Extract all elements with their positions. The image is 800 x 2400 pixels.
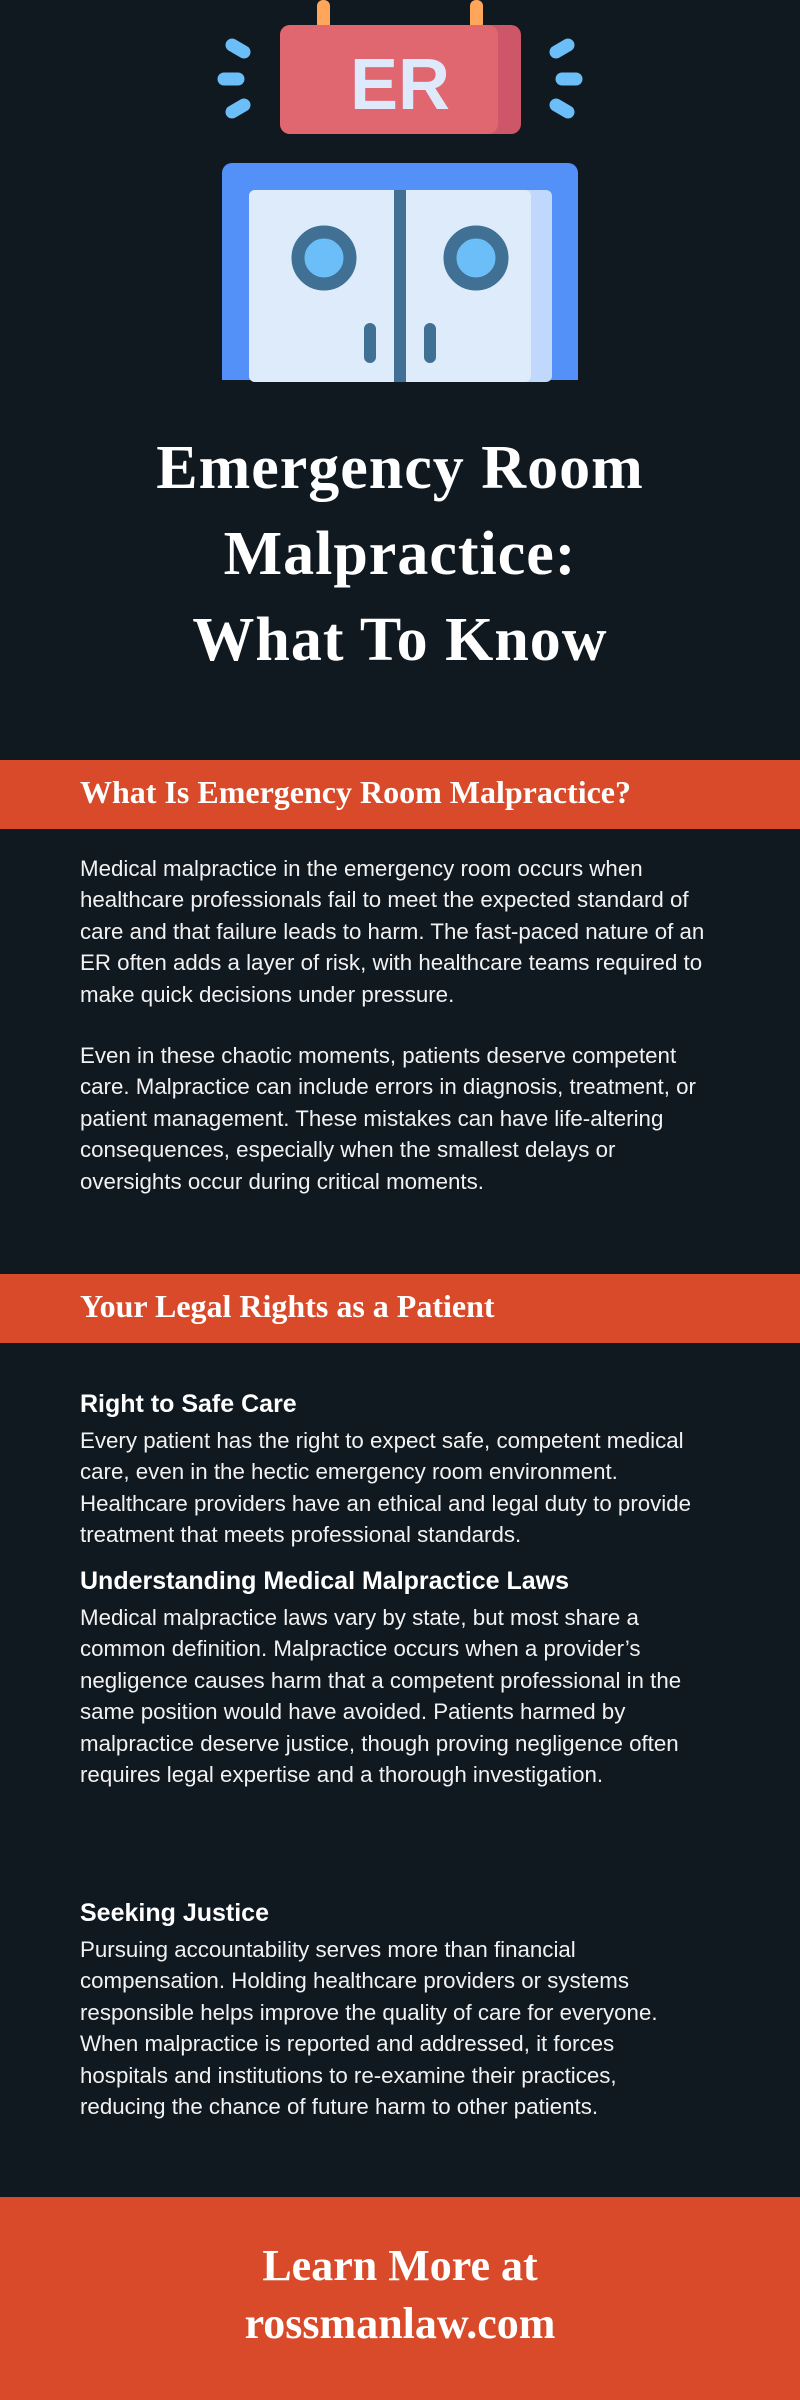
footer: learn more [0, 2197, 800, 2400]
text block: malpractice laws: common definition. Malpractice occurs when a provider’s [80, 1636, 641, 1661]
heading bar: legal rights: Your Legal Rights as a Patient [80, 1288, 495, 1324]
text block: seeking justice: responsible helps improve the quality of care for everyone. [80, 2000, 658, 2025]
subheading: right to safe care: Right to Safe Care [80, 1390, 297, 1418]
title [156, 434, 644, 674]
text block: definition paragraph 2: care. Malpractice can include errors in diagnosis, treatment, or [80, 1074, 696, 1099]
text block: definition paragraph 2 [80, 1043, 696, 1194]
title: What To Know [192, 606, 608, 674]
text block: right to safe care [80, 1428, 691, 1547]
text block: right to safe care: treatment that meets professional standards. [80, 1522, 521, 1547]
icon: ER sign and doors [218, 0, 582, 382]
text block: definition paragraph 2: patient management. These mistakes can have life-altering [80, 1106, 663, 1131]
text block: malpractice laws: same position would have avoided. Patients harmed by [80, 1699, 625, 1724]
text block: malpractice laws: malpractice deserve justice, though proving negligence often [80, 1731, 679, 1756]
text block: right to safe care: Every patient has the right to expect safe, competent medical [80, 1428, 684, 1453]
text block: seeking justice: When malpractice is reported and addressed, it forces [80, 2031, 614, 2056]
text block: malpractice laws: requires legal expertise and a thorough investigation. [80, 1762, 603, 1787]
footer: learn more: rossmanlaw.com [245, 2299, 555, 2348]
text block: definition paragraph 1: healthcare professionals fail to meet the expected standard of [80, 887, 689, 912]
heading bar: legal rights [0, 1274, 800, 1343]
text block: seeking justice: Pursuing accountability serves more than financial [80, 1937, 576, 1962]
title: Emergency Room [156, 434, 644, 502]
text block: seeking justice: compensation. Holding healthcare providers or systems [80, 1968, 629, 1993]
footer: learn more: Learn More at [262, 2241, 538, 2290]
title: Malpractice: [224, 520, 576, 588]
text block: right to safe care: care, even in the hectic emergency room environment. [80, 1459, 618, 1484]
subheading: seeking justice: Seeking Justice [80, 1899, 269, 1927]
text block: definition paragraph 1: make quick decisions under pressure. [80, 982, 454, 1007]
text block: seeking justice [80, 1937, 658, 2119]
heading bar: what is ER malpractice: What Is Emergency Room Malpractice? [80, 774, 631, 810]
heading bar: what is ER malpractice [0, 760, 800, 829]
text block: right to safe care: Healthcare providers have an ethical and legal duty to provide [80, 1491, 691, 1516]
text block: definition paragraph 2: oversights occur during critical moments. [80, 1169, 484, 1194]
text block: definition paragraph 1 [80, 856, 704, 1007]
text block: seeking justice: reducing the chance of future harm to other patients. [80, 2094, 598, 2119]
text block: seeking justice: hospitals and institutions to re-examine their practices, [80, 2063, 617, 2088]
text block: malpractice laws: Medical malpractice laws vary by state, but most share a [80, 1605, 639, 1630]
text block: definition paragraph 2: Even in these chaotic moments, patients deserve competent [80, 1043, 676, 1068]
text block: malpractice laws [80, 1605, 681, 1787]
text block: definition paragraph 1: Medical malpractice in the emergency room occurs when [80, 856, 643, 881]
text block: definition paragraph 1: ER often adds a layer of risk, with healthcare teams required to [80, 950, 702, 975]
text block: malpractice laws: negligence causes harm that a competent professional in the [80, 1668, 681, 1693]
text block: definition paragraph 1: care and that failure leads to harm. The fast-paced nature of an [80, 919, 704, 944]
subheading: malpractice laws: Understanding Medical Malpractice Laws [80, 1567, 569, 1595]
icon: ER sign and doors: ER [350, 45, 450, 125]
text block: definition paragraph 2: consequences, especially when the smallest delays or [80, 1137, 615, 1162]
